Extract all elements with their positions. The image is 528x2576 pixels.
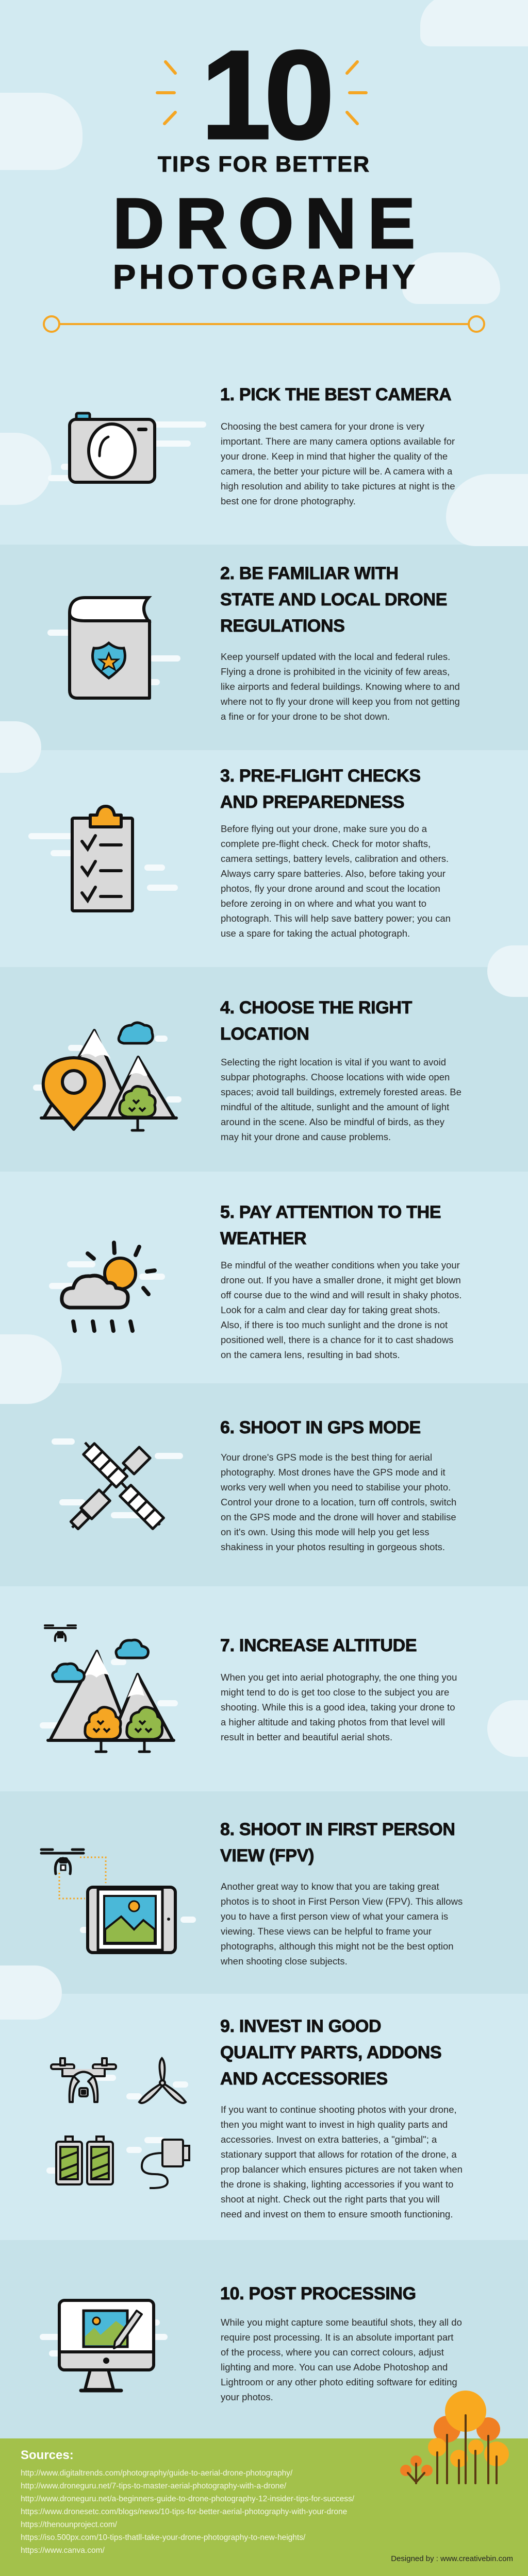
heading 1: 1. PICK THE BEST CAMERA [220,385,451,404]
text 8: viewing. These views can be helpful to frame your [221,1926,432,1937]
text 3: photograph. This will help save battery power; you can [221,913,451,924]
text 10: While you might capture some beautiful shots, they all do [221,2317,462,2328]
text 6: works very well when you need to stabilise your photo. [221,1482,451,1493]
icon: camera [48,412,206,484]
text 1: high resolution and ability to take pictures at night is the [221,481,455,492]
text 10: Lightroom or any other photo editing software for editing [221,2377,457,2387]
sources list [21,2469,354,2555]
text 6: Control your drone to a location, turn off controls, switch [221,1497,456,1507]
text 8: Another great way to know that you are taking great [221,1881,439,1892]
text 7: a higher altitude and taking photos from that level will [221,1717,445,1727]
text 10: of the process, where you can correct colours, adjust [221,2347,444,2358]
text 10: require post processing. It is an absolute important part [221,2332,453,2343]
heading 3: AND PREPAREDNESS [220,792,404,812]
text 7: result in better and beautiful aerial shots. [221,1732,392,1742]
text 7: When you get into aerial photography, the one thing you [221,1672,457,1683]
icon: monitor with photo editing [40,2299,168,2393]
text 5: Also, if there is too much sunlight and the drone is not [221,1319,448,1330]
sources list: https://www.dronesetc.com/blogs/news/10-tips-for-better-aerial-photography-with-your-drone [21,2507,347,2516]
text 1: camera, the better your picture will be. A camera with a [221,466,452,477]
icon: checklist [28,805,178,912]
sources heading: Sources: [21,2448,74,2462]
text 2 [221,651,460,722]
icon: weather [49,1241,165,1333]
text 6 [221,1452,456,1552]
text 10: your photos. [221,2392,273,2402]
text 1: your drone. Keep in mind that higher the quality of the [221,451,448,462]
text 5: off course due to the wind and will result in shaky photos. [221,1290,462,1300]
sources list: https://www.canva.com/ [21,2546,105,2555]
text 5: positioned well, there is a chance for it to cast shadows [221,1334,453,1345]
text 9: shoot at night. Check out the right parts that you will [221,2194,440,2205]
icon: autumn trees [400,2391,509,2484]
text 3: before zeroing in on where and what you want to [221,898,426,909]
text 3: Before flying out your drone, make sure you do a [221,823,427,834]
text 10 [221,2317,462,2402]
text 7 [221,1672,457,1742]
text 3: use a spare for taking the actual photograph. [221,928,410,939]
text 3: photos, fly your drone around and scout the location [221,883,440,894]
title: rays [156,60,368,125]
heading 2: 2. BE FAMILIAR WITH [220,564,399,583]
heading 2 [220,564,447,636]
text 9 [221,2104,463,2219]
heading 8: 8. SHOOT IN FIRST PERSON [220,1820,455,1839]
icon: drone over mountains [40,1624,178,1753]
text 1: important. There are many camera options available for [221,436,455,447]
icon: FPV drone and tablet [40,1849,196,1954]
heading 10: 10. POST PROCESSING [220,2284,416,2303]
text 2: where not to fly your drone will keep you from not getting [221,696,460,707]
text 5 [221,1260,462,1360]
text 9: need and invest on them to ensure smooth functioning. [221,2209,453,2219]
heading 7: 7. INCREASE ALTITUDE [220,1636,417,1655]
icon: satellite [52,1438,183,1530]
text 9: accessories. Invest on extra batteries, a "gimbal"; a [221,2134,437,2145]
text 7: shooting. While this is a good idea, taking your drone to [221,1702,455,1713]
heading 9: AND ACCESSORIES [220,2069,388,2089]
text 4 [221,1057,461,1142]
icon: rule book [47,596,180,700]
text 4: around in the scene. Also be mindful of birds, as they [221,1116,444,1127]
heading 2: REGULATIONS [220,616,345,636]
text 8: you to have a first person view of what your camera is [221,1911,448,1922]
text 8 [221,1881,463,1967]
text 6: photography. Most drones have the GPS mode and it [221,1467,446,1478]
sources list: https://thenounproject.com/ [21,2520,117,2529]
text 8: photos is to shoot in First Person View (FPV). This allows [221,1896,463,1907]
text 8: photographs, although this might not be the best option [221,1941,454,1952]
text 9: stationary support that allows for rotation of the drone, a [221,2149,457,2160]
text 5: Be mindful of the weather conditions when you take your [221,1260,460,1270]
heading 3 [220,766,421,812]
text 6: shakiness in your photos resulting in gorgeous shots. [221,1541,445,1552]
text 6: Your drone's GPS mode is the best thing for aerial [221,1452,432,1463]
heading 5 [220,1202,441,1248]
designer credit: Designed by : www.creativebin.com [391,2554,513,2563]
heading 4 [220,998,412,1044]
text 7: might tend to do is get too close to the subject you are [221,1687,449,1698]
heading 9: QUALITY PARTS, ADDONS [220,2043,441,2062]
title: tips for better: TIPS FOR BETTER [158,152,370,177]
icon: drone parts and accessories [46,2057,190,2189]
text 4: spaces; avoid tall buildings, extremely forested areas. Be [221,1087,461,1097]
text 1: Choosing the best camera for your drone is very [221,421,424,432]
heading 8: VIEW (FPV) [220,1846,314,1866]
title: photography: PHOTOGRAPHY [113,258,419,296]
text 5: Look for a calm and clear day for taking great shots. [221,1304,440,1315]
heading 3: 3. PRE-FLIGHT CHECKS [220,766,421,786]
heading 2: STATE AND LOCAL DRONE [220,590,447,609]
text 6: on the GPS mode and the drone will hover and stabilise [221,1512,456,1522]
text 6: on it's own. Using this mode will help you get less [221,1527,430,1537]
text 9: prop balancer which ensures pictures are not taken when [221,2164,463,2175]
sources list: http://www.droneguru.net/7-tips-to-master-aerial-photography-with-a-drone/ [21,2482,286,2490]
heading 9: 9. INVEST IN GOOD [220,2016,381,2036]
text 4: Selecting the right location is vital if you want to avoid [221,1057,446,1067]
text 9: then you might want to invest in high quality parts and [221,2119,448,2130]
text 4: may hit your drone and cause problems. [221,1131,391,1142]
text 2: like airports and federal buildings. Knowing where to and [221,681,460,692]
title divider [43,315,485,333]
title: drone: DRONE [113,184,426,263]
text 10: lighting and more. You can use Adobe Photoshop and [221,2362,448,2372]
text 4: subpar photographs. Choose locations with wide open [221,1072,450,1082]
title: number 10: 10 [201,24,327,166]
heading 5: 5. PAY ATTENTION TO THE [220,1202,441,1222]
heading 6: 6. SHOOT IN GPS MODE [220,1418,421,1437]
heading 4: LOCATION [220,1024,309,1044]
text 9: the drone is shaking, lighting accessories if you want to [221,2179,453,2190]
sources list: http://www.droneguru.net/a-beginners-guide-to-drone-photography-12-insider-tips-for-success/ [21,2495,354,2503]
text 1 [221,421,455,506]
text 4: mindful of the altitude, sunlight and the amount of light [221,1101,449,1112]
text 2: Keep yourself updated with the local and federal rules. [221,651,450,662]
sources list: https://iso.500px.com/10-tips-thatll-take-your-drone-photography-to-new-heights/ [21,2533,305,2542]
text 2: Flying a drone is prohibited in the vicinity of few areas, [221,666,450,677]
text 3: complete pre-flight check. Check for motor shafts, [221,838,431,849]
sources list: http://www.digitaltrends.com/photography/guide-to-aerial-drone-photography/ [21,2469,292,2478]
text 5: drone out. If you have a smaller drone, it might get blown [221,1275,461,1285]
text 1: best one for drone photography. [221,496,356,506]
heading 8 [220,1820,455,1866]
text 2: a fine or for your drone to be shot down. [221,711,390,722]
heading 4: 4. CHOOSE THE RIGHT [220,998,412,1018]
text 8: when shooting close subjects. [221,1956,348,1967]
icon: location map [33,1021,182,1131]
text 3: Always carry spare batteries. Also, before taking your [221,868,446,879]
heading 9 [220,2016,441,2089]
heading 5: WEATHER [220,1229,306,1248]
text 5: on the camera lens, resulting in bad shots. [221,1349,400,1360]
text 9: If you want to continue shooting photos with your drone, [221,2104,457,2115]
text 3: camera settings, battery levels, calibration and others. [221,853,449,864]
text 3 [221,823,451,939]
